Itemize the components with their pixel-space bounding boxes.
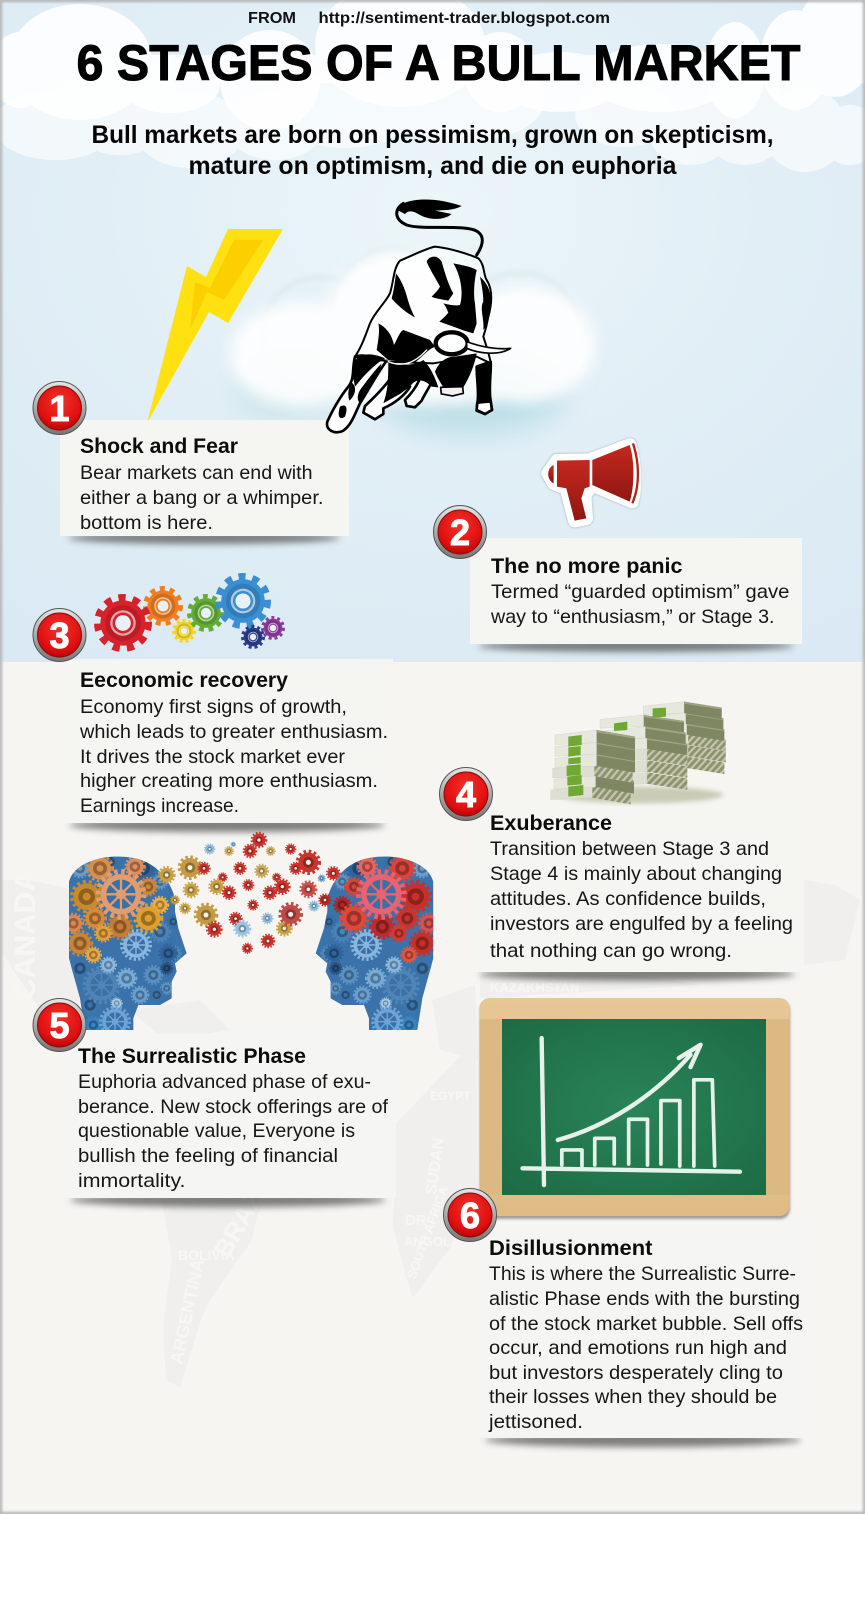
stage 4 body: attitudes. As confidence builds, bbox=[490, 888, 766, 910]
right head bbox=[316, 856, 434, 1030]
stage 3 badge bbox=[33, 608, 86, 662]
stage 2 heading: The no more panic bbox=[491, 554, 683, 578]
stage 5 body: questionable value, Everyone is bbox=[78, 1120, 355, 1142]
icon: lightning bolt bbox=[147, 229, 283, 423]
icon: stacks of money bbox=[551, 702, 726, 804]
stage 1 badge bbox=[33, 382, 86, 434]
stage 4 body: Transition between Stage 3 and bbox=[490, 838, 769, 860]
stage 4 heading: Exuberance bbox=[490, 811, 612, 835]
chalk growth arrow bbox=[558, 1045, 701, 1140]
stage 4 body: Stage 4 is mainly about changing bbox=[490, 863, 782, 885]
stage 5 heading: The Surrealistic Phase bbox=[78, 1044, 306, 1068]
stage 3 body: Earnings increase. bbox=[80, 795, 239, 817]
world map backdrop: CANADA bbox=[9, 870, 42, 1000]
stage 4 body: that nothing can go wrong. bbox=[490, 940, 732, 962]
stage 5 body: Euphoria advanced phase of exu- bbox=[78, 1071, 371, 1093]
stage 6 body: jettisoned. bbox=[488, 1411, 583, 1433]
stage 6 body: occur, and emotions run high and bbox=[489, 1337, 787, 1359]
stage 1 body: bottom is here. bbox=[80, 512, 213, 534]
chalk bars bbox=[562, 1080, 715, 1166]
stage 5 body: bullish the feeling of financial bbox=[78, 1145, 338, 1167]
icon: heads with gears bbox=[64, 833, 439, 1036]
stage 4 badge bbox=[440, 768, 492, 820]
stage 2 body bbox=[490, 581, 790, 628]
stage 5 badge bbox=[33, 998, 86, 1052]
middle stack bbox=[600, 708, 687, 790]
stage 6 body: of the stock market bubble. Sell offs bbox=[489, 1313, 803, 1335]
world map backdrop bbox=[0, 870, 860, 1387]
icon: charging bull bbox=[327, 199, 511, 432]
panel: stage 1 bbox=[33, 382, 349, 544]
world map backdrop: BRAZIL bbox=[207, 1165, 281, 1263]
world map backdrop: ANGOLA bbox=[404, 1234, 461, 1249]
icon: coloured gears bbox=[97, 576, 284, 649]
stage 4 body bbox=[490, 838, 793, 962]
stage 3 body: which leads to greater enthusiasm. bbox=[79, 721, 388, 743]
stage 4 badge: 4 bbox=[456, 774, 476, 815]
bull horn and snout bbox=[436, 332, 511, 396]
stage 4 body: investors are engulfed by a feeling bbox=[490, 913, 793, 935]
left head bbox=[69, 856, 187, 1030]
stage 5 badge: 5 bbox=[49, 1005, 70, 1046]
subtitle: Bull markets are born on pessimism, grown on skepticism, bbox=[92, 121, 774, 149]
stage 6 body: but investors desperately cling to bbox=[489, 1362, 783, 1384]
stage 1 body: either a bang or a whimper. bbox=[80, 487, 324, 509]
icon: cloud behind bull bbox=[230, 248, 595, 435]
stage 2 badge bbox=[434, 506, 486, 558]
world map backdrop: KAZAKHSTAN bbox=[490, 980, 579, 995]
stage 3 body bbox=[79, 696, 388, 817]
world map backdrop: BOLIVIA bbox=[178, 1247, 235, 1263]
bull legs bbox=[327, 357, 492, 432]
stage 6 body bbox=[488, 1263, 803, 1433]
stage 6 body: their losses when they should be bbox=[489, 1386, 777, 1408]
floating gears bbox=[159, 833, 340, 953]
stage 5 body: immortality. bbox=[78, 1170, 186, 1192]
stage 5 body bbox=[78, 1071, 389, 1192]
panel: stage 6 bbox=[476, 1218, 810, 1447]
stage 3 body: Economy first signs of growth, bbox=[80, 696, 347, 718]
stage 6 body: This is where the Surrealistic Surre- bbox=[489, 1263, 796, 1285]
world map backdrop: ARGENTINA bbox=[166, 1257, 208, 1366]
stage 1 heading: Shock and Fear bbox=[80, 434, 239, 458]
world map backdrop: SOUTH AFRICA bbox=[404, 1183, 451, 1281]
world map backdrop: SUDAN bbox=[423, 1137, 448, 1196]
stage 3 body: It drives the stock market ever bbox=[80, 746, 346, 768]
stage 3 badge: 3 bbox=[49, 615, 70, 656]
stage 1 badge: 1 bbox=[49, 388, 70, 429]
stage 3 heading: Eeconomic recovery bbox=[80, 668, 288, 692]
stage 6 badge bbox=[444, 1188, 496, 1242]
clouds across the header bbox=[0, 0, 865, 172]
panel: stage 3 bbox=[33, 608, 393, 832]
world map backdrop: EGYPT bbox=[430, 1089, 471, 1103]
chalkboard chart bbox=[480, 998, 790, 1219]
stage 3 body: higher creating more enthusiasm. bbox=[80, 770, 378, 792]
stage 6 body: alistic Phase ends with the bursting bbox=[489, 1288, 800, 1310]
front stack bbox=[551, 730, 635, 804]
panel: stage 5 bbox=[33, 998, 396, 1207]
back stack bbox=[643, 702, 726, 774]
stage 2 body: Termed “guarded optimism” gave bbox=[491, 581, 790, 603]
bull torso bbox=[355, 247, 491, 363]
title: 6 STAGES OF A BULL MARKET bbox=[76, 35, 800, 91]
chalk axes bbox=[523, 1038, 740, 1185]
icon: megaphone bbox=[548, 443, 638, 521]
subtitle bbox=[92, 121, 774, 180]
source line: FROM bbox=[248, 10, 296, 27]
panel: stage 2 bbox=[434, 506, 802, 652]
bull markings bbox=[339, 257, 491, 418]
stage 5 body: berance. New stock offerings are of bbox=[78, 1096, 389, 1118]
source line: http://sentiment-trader.blogspot.com bbox=[318, 10, 610, 27]
bull tail bbox=[397, 199, 482, 255]
stage 6 heading: Disillusionment bbox=[489, 1236, 652, 1260]
stage 2 badge: 2 bbox=[450, 512, 470, 553]
stage 6 badge: 6 bbox=[460, 1195, 480, 1236]
stage 2 body: way to “enthusiasm,” or Stage 3. bbox=[490, 606, 774, 628]
world map backdrop: DR bbox=[405, 1212, 427, 1229]
panel: stage 4 bbox=[472, 808, 803, 981]
stage 1 body: Bear markets can end with bbox=[80, 462, 312, 484]
stage 1 body bbox=[80, 462, 324, 534]
subtitle: mature on optimism, and die on euphoria bbox=[188, 152, 678, 180]
